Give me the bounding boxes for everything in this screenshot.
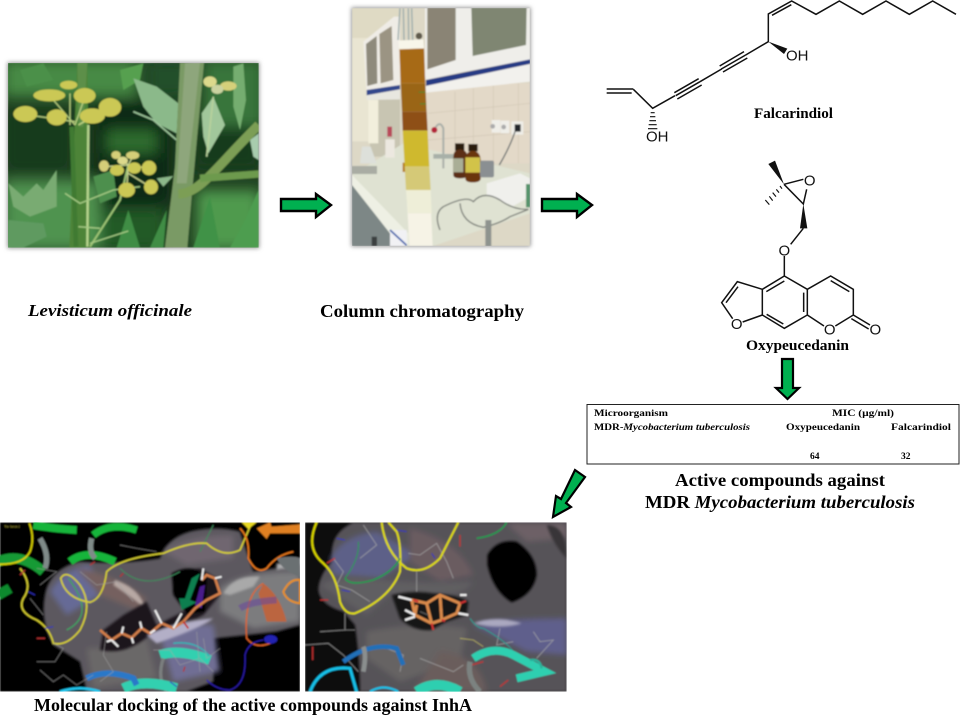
caption: molecular docking: Molecular docking of the active compounds against InhA — [34, 695, 472, 715]
chemical structure: falcarindiol: OH — [786, 48, 808, 65]
table: MIC values: Microorganism — [594, 409, 668, 419]
table: MIC values: Oxypeucedanin — [786, 423, 861, 433]
ribbons: teal and blue helix — [60, 643, 210, 692]
label: Oxypeucedanin: Oxypeucedanin — [746, 338, 849, 354]
chemical structure: oxypeucedanin: O — [824, 322, 835, 339]
label: Falcarindiol: Falcarindiol — [754, 106, 833, 122]
table: MIC values: 64 — [810, 452, 820, 462]
label: Column chromatography: Column chromatography — [320, 301, 524, 321]
table: MIC values: Falcarindiol — [891, 423, 951, 433]
ribbons: orange — [207, 522, 300, 690]
arrow: column to compounds — [542, 194, 592, 217]
chemical structure: oxypeucedanin — [722, 161, 881, 339]
chemical structure: oxypeucedanin: O — [731, 316, 742, 333]
arrow: table to docking — [553, 470, 585, 517]
ligand: falcarindiol sticks — [100, 568, 222, 647]
surface: protein pocket — [318, 522, 567, 692]
table: MIC values — [587, 404, 959, 464]
chemical structure: oxypeucedanin: O — [870, 322, 881, 339]
chemical structure: falcarindiol — [607, 1, 956, 145]
arrow: plant to column — [281, 194, 331, 217]
table: MIC values: 32 — [901, 452, 911, 462]
chemical structure: oxypeucedanin: O — [779, 242, 790, 259]
image: docking of falcarindiol in InhA: Title: Sample 2 — [4, 525, 20, 528]
ribbons: green helix — [0, 525, 213, 630]
ribbons: green loop — [345, 522, 513, 652]
photo: column chromatography lab — [351, 7, 531, 247]
table: MIC values: MIC (µg/ml) — [832, 408, 894, 419]
sticks: side chain wires — [30, 545, 220, 685]
photo: Levisticum officinale plant — [3, 60, 263, 250]
table: MIC values: MDR- Mycobacterium tuberculosis — [594, 423, 750, 433]
ligand: oxypeucedanin sticks — [398, 595, 468, 630]
ribbons: yellow loop — [0, 523, 250, 644]
ribbons: teal and blue helix — [310, 647, 545, 692]
image: docking of falcarindiol in InhA — [0, 522, 300, 692]
chemical structure: falcarindiol: OH — [646, 128, 668, 145]
ribbons: yellow loop — [312, 522, 458, 614]
surface: protein pocket — [44, 528, 300, 692]
chemical structure: oxypeucedanin: O — [804, 172, 815, 189]
heading: active compounds — [645, 470, 915, 512]
arrow: compounds to table — [776, 359, 799, 399]
image: docking of oxypeucedanin in InhA — [305, 522, 567, 692]
heading: active compounds: Active compounds against — [675, 470, 885, 490]
heading: active compounds: MDR Mycobacterium tuberculosis — [645, 492, 915, 512]
sticks: side chain wires — [305, 525, 553, 672]
label: Levisticum officinale: Levisticum officinale — [27, 301, 192, 320]
